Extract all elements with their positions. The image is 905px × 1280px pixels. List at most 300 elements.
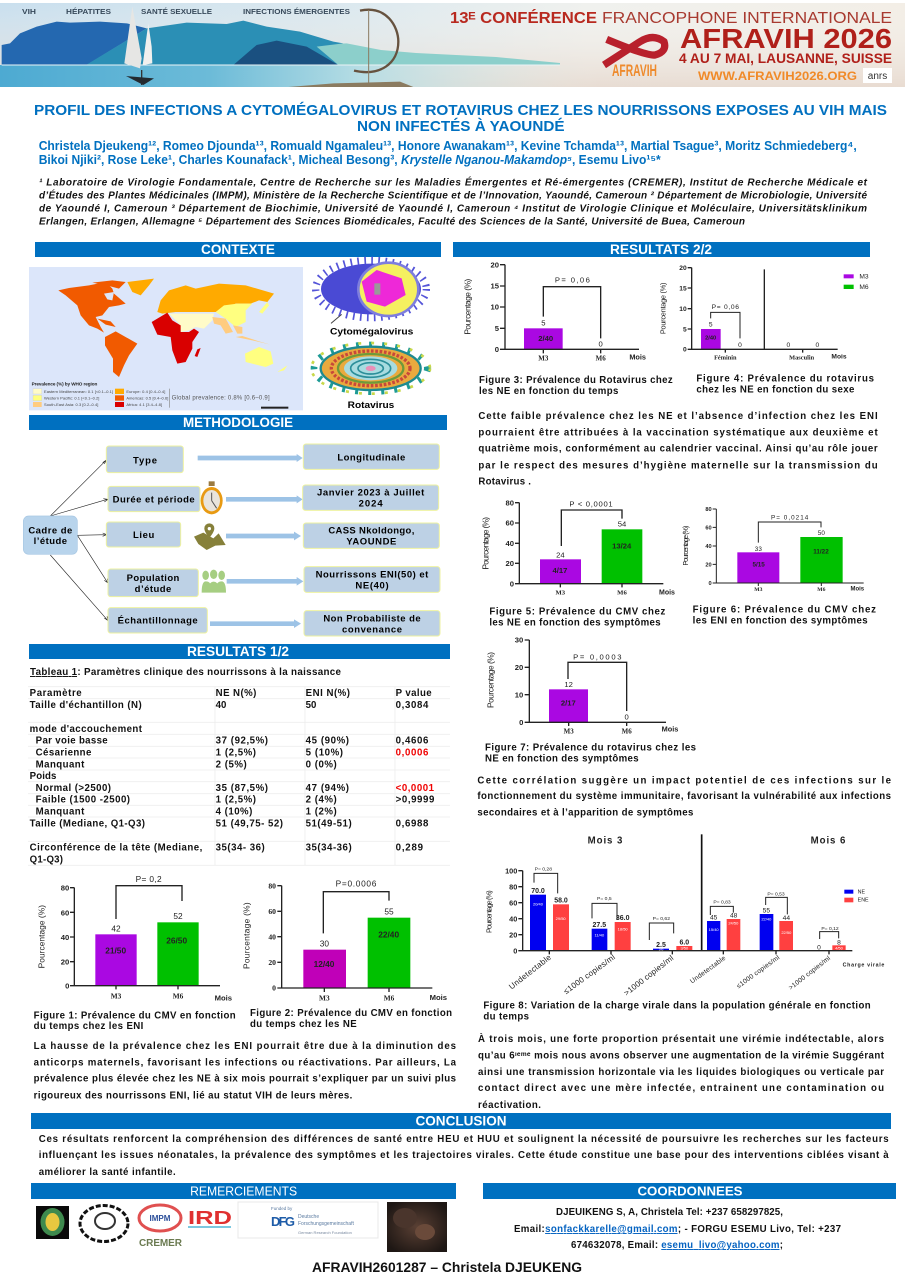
- chart: figure 5: P < 0,0001: [569, 499, 613, 508]
- box: type: Type: [133, 455, 157, 466]
- chart: figure 8 viral load: 6.0: [679, 939, 689, 946]
- box: population: d’étude: [135, 584, 171, 595]
- caption: figure 1: du temps chez les ENI: [34, 1021, 144, 1032]
- text: correlation: [477, 775, 892, 819]
- conference heading: 4 AU 7 MAI, LAUSANNE, SUISSE: [679, 50, 892, 66]
- chart: figure 3: 5: [541, 319, 545, 328]
- conference heading: [450, 10, 892, 83]
- table body rows: [30, 700, 435, 865]
- caption: figure 5: [489, 607, 666, 629]
- chart: figure 6: 60: [705, 525, 712, 531]
- chart: figure 8 viral load: >1000 copies/ml: [788, 955, 832, 992]
- text: rotavirus interpretation: [478, 411, 878, 487]
- chart: figure 6: [683, 507, 865, 593]
- table body rows: 37 (92,5%): [216, 736, 268, 747]
- map legend: Africa: 4.1 [3.4–4.8]: [126, 402, 162, 407]
- chart: figure 2: M6: [384, 994, 395, 1003]
- caption: figure 2: [250, 1008, 452, 1030]
- chart: figure 8 viral load: ≤1000 copies/ml: [562, 953, 617, 996]
- arrow heads: [294, 454, 303, 628]
- chart: figure 7: 0: [625, 713, 629, 722]
- chart: figure 7: 0: [519, 718, 523, 727]
- chart: figure 2: 55: [384, 906, 394, 916]
- table body rows: Manquant: [36, 759, 85, 770]
- text: correlation: fonctionnement du système immunitaire, favorisant la vulnérabilité aux infections: [477, 791, 891, 802]
- table body rows: <0,0001: [396, 783, 435, 794]
- chart: figure 7: P= 0,0003: [573, 652, 621, 661]
- section header: methodologie: METHODOLOGIE: [183, 415, 293, 430]
- text: rotavirus interpretation: quatrième mois, conformément au calendrier vaccinal. Ainsi qu’au rôle jouer: [478, 444, 878, 455]
- table body rows: 0,0006: [396, 748, 429, 759]
- logos: [36, 1202, 447, 1252]
- conference heading: AFRAVIH 2026: [680, 23, 892, 54]
- chart: figure 1: 52: [173, 911, 183, 921]
- afravih ribbon logo: [604, 37, 665, 80]
- chart: figure 4: 2/40: [705, 336, 716, 342]
- chart: figure 2: 22/40: [378, 930, 399, 940]
- text: viral load interpretation: ainsi une transmission horizontale via les liquides biologiques ou verticale par: [478, 1067, 884, 1078]
- title: PROFIL DES INFECTIONS A CYTOMÉGALOVIRUS ET ROTAVIRUS CHEZ LES NOURRISSONS EXPOSES AU VIH MAIS: [34, 102, 887, 119]
- box: cass: CASS Nkoldongo,: [328, 526, 414, 537]
- box: janvier: [303, 485, 439, 510]
- title: [34, 102, 887, 135]
- chart: figure 1: 20: [61, 958, 69, 967]
- table body rows: 0,3084: [396, 700, 429, 711]
- world map: [29, 267, 303, 410]
- footer reference: AFRAVIH2601287 – Christela DJEUKENG: [312, 1260, 582, 1275]
- chart: figure 8 viral load: 36.0: [616, 915, 630, 922]
- chart: figure 3: M3: [538, 354, 549, 362]
- logo: dfg: German Research Foundation: [298, 1230, 352, 1235]
- chart: figure 1: 21/50: [105, 945, 126, 955]
- conference heading: FRANCOPHONE INTERNATIONALE: [602, 10, 892, 27]
- text: viral load interpretation: À trois mois, une forte proportion présentait une virémie indétectable, alors: [478, 1034, 884, 1045]
- chart: figure 8 viral load: 0: [817, 945, 821, 952]
- chart: figure 5: Pourcentage (%): [481, 517, 491, 570]
- icon: stopwatch: [201, 481, 223, 514]
- table body rows: 5 (10%): [306, 748, 343, 759]
- label: rotavirus: Rotavirus: [348, 400, 394, 410]
- map legend: Americas: 0.5 [0.4–0.6]: [126, 396, 168, 401]
- box: non probabiliste: convenance: [342, 624, 402, 635]
- banner themes: VIH: [22, 9, 36, 16]
- box: janvier: Janvier 2023 à Juillet: [317, 488, 425, 499]
- box: longitudinale: [303, 444, 439, 469]
- caption: figure 4: Figure 4: Prévalence du rotavirus: [696, 373, 874, 384]
- section header: remerciements: REMERCIEMENTS: [190, 1184, 297, 1198]
- caption: figure 3: Figure 3: Prévalence du Rotavirus chez: [479, 375, 673, 386]
- chart: figure 2: Mois: [430, 993, 447, 1002]
- section header: contexte: [35, 242, 441, 257]
- arrow: type: [198, 451, 299, 465]
- chart: figure 7: [486, 636, 678, 736]
- section header: conclusion: CONCLUSION: [416, 1114, 506, 1128]
- table grid: [28, 687, 450, 865]
- figure 4 legend: M6: [859, 284, 869, 291]
- chart: figure 1: [36, 874, 232, 1003]
- conference heading: WWW.AFRAVIH2026.ORG: [698, 69, 857, 83]
- chart: figure 8 viral load: P= 0,12: [821, 926, 839, 932]
- chart: figure 7: 20: [515, 663, 523, 672]
- chart: figure 4: Mois: [831, 354, 847, 361]
- chart: figure 1: M6: [173, 991, 184, 1000]
- text: correlation: secondaires et à l’apparition de symptômes: [477, 808, 693, 819]
- chart: figure 6: 20: [705, 562, 712, 568]
- chart: figure 8 viral load: P= 0,5: [597, 896, 612, 902]
- chart: figure 4: 20: [679, 265, 687, 272]
- caption: figure 7: NE en fonction des symptômes: [485, 753, 639, 764]
- chart: figure 8 viral load: >1000 copies/ml: [622, 953, 675, 998]
- chart: figure 6: 33: [755, 546, 762, 553]
- chart: figure 8 viral load: 40: [509, 914, 517, 923]
- table body rows: 47 (94%): [306, 783, 349, 794]
- figure 7 with caption and text: [477, 636, 892, 819]
- table title: Tableau 1: Paramètres clinique des nourrissons à la naissance: [30, 667, 342, 678]
- chart: figure 4: 5: [709, 321, 713, 328]
- table body rows: 35 (87,5%): [216, 783, 268, 794]
- caption: figure 1: [34, 1010, 236, 1032]
- table header row: NE N(%): [216, 688, 256, 699]
- figures 1 and 2 with captions: [34, 874, 457, 1101]
- box: nourrissons: [304, 567, 440, 592]
- logo: impm: [139, 1205, 181, 1231]
- chart: figure 8 viral load: 80: [509, 882, 517, 891]
- box: type: [106, 446, 183, 473]
- section header: coordonnees: [483, 1183, 896, 1199]
- chart: figure 1: Mois: [215, 994, 232, 1003]
- chart: figure 8 viral load: 55: [763, 908, 770, 915]
- box: echantillonnage: Échantillonnage: [118, 616, 198, 627]
- chart: figure 8 viral load: Mois 3: [588, 836, 623, 847]
- chart: figure 1: M3: [111, 991, 122, 1000]
- chart: figure 2: 12/40: [314, 959, 335, 969]
- text: prevalence interpretation: prévalence plus élevée chez les NE à six mois pourrait s’expliquer par un suivi plus: [34, 1074, 456, 1085]
- caption: figure 2: Figure 2: Prévalence du CMV en fonction: [250, 1008, 452, 1019]
- section header: resultats 1/2: RESULTATS 1/2: [187, 644, 289, 659]
- figure 8 with caption: [483, 834, 884, 1023]
- contact details: DJEUIKENG S, A, Christela Tel: +237 658297825,: [556, 1207, 783, 1218]
- section header: conclusion: [31, 1113, 891, 1129]
- logo: dfg: Deutsche: [298, 1214, 319, 1220]
- box: non probabiliste: Non Probabiliste de: [323, 613, 421, 624]
- chart: figure 8 viral load: P= 0,83: [713, 900, 731, 906]
- table header row: ENI N(%): [306, 688, 350, 699]
- chart: figure 1: 42: [111, 923, 121, 933]
- box: janvier: 2024: [359, 499, 383, 510]
- chart: figure 3: 20: [490, 260, 499, 269]
- chart: figure 6: Mois: [851, 587, 865, 593]
- chart: figure 7: M6: [622, 728, 632, 736]
- logo: dfg: Forschungsgemeinschaft: [298, 1221, 354, 1227]
- chart: figure 5: 4/17: [553, 566, 567, 575]
- chart: figure 7: 10: [515, 690, 523, 699]
- chart: figure 8 viral load: 44: [783, 915, 790, 922]
- banner themes: [22, 7, 350, 16]
- table body rows: 0,4606: [396, 736, 429, 747]
- caption: figure 4: chez les NE en fonction du sexe: [696, 384, 855, 395]
- chart: figure 1: 60: [61, 908, 69, 917]
- contact details: Email:sonfackkarelle@gmail.com; - FORGU ESEMU Livo, Tel: +237: [514, 1224, 841, 1235]
- table body rows: Taille (Mediane, Q1-Q3): [30, 818, 145, 829]
- chart: figure 7: Mois: [662, 724, 678, 733]
- authors: [39, 139, 857, 167]
- chart: figure 8 viral load: 27.5: [593, 922, 606, 929]
- chart: figure 5: 13/24: [612, 541, 632, 550]
- chart: figure 1: P= 0,2: [136, 874, 162, 884]
- table body rows: 0,289: [396, 842, 424, 853]
- table body rows: Faible (1500 -2500): [36, 795, 130, 806]
- chart: figure 6: M6: [817, 587, 826, 593]
- section header: remerciements: [31, 1183, 456, 1199]
- box: cadre de l'etude: [23, 516, 77, 554]
- chart: figure 8 viral load: Undetectable: [689, 955, 727, 985]
- banner: [0, 3, 905, 87]
- chart: figure 4: Pourcentage (%): [658, 282, 667, 334]
- banner themes: HÉPATITES: [66, 7, 111, 16]
- figure 8 legend: [844, 890, 869, 904]
- chart: figure 3: P= 0,06: [555, 276, 590, 285]
- panel: virus illustrations: [311, 260, 430, 410]
- arrow: duree: [226, 492, 299, 506]
- map legend: Global prevalence: 0.8% [0.6–0.9]: [172, 396, 270, 402]
- table body rows: Circonférence de la tête (Mediane,: [30, 842, 203, 853]
- logo: cremer: CREMER: [139, 1238, 183, 1249]
- chart: figure 6: 0: [709, 581, 712, 587]
- chart: figure 5: 24: [556, 550, 565, 559]
- contact details: 674632078, Email: esemu_livo@yahoo.com;: [571, 1240, 783, 1251]
- text: prevalence interpretation: La hausse de la prévalence chez les ENI pourrait être due à la diminution des: [34, 1041, 456, 1052]
- authors: Christela Djeukeng¹², Romeo Djounda¹³, Romuald Ngamaleu¹³, Honore Awanakam¹³, Kevine Tchamda¹³, Martial Tsague³, Moritz Schmiedeberg⁴,: [39, 139, 857, 153]
- caption: figure 6: les ENI en fonction des symptômes: [693, 616, 868, 627]
- table body rows: 4 (10%): [216, 807, 252, 818]
- table header row: P value: [396, 688, 432, 699]
- table header row: [30, 688, 432, 699]
- chart: figure 8 viral load: 70.0: [531, 888, 545, 895]
- arrow: lieu: [226, 529, 297, 543]
- text: rotavirus interpretation: pourraient être attribuées à la vaccination systématique aux deuxième et: [478, 427, 878, 438]
- map legend: South-East Asia: 0.3 [0.2–0.4]: [44, 402, 98, 407]
- text: correlation: Cette corrélation suggère un impact potentiel de ces infections sur le: [477, 775, 892, 786]
- table body rows: 35(34-36): [306, 842, 352, 853]
- chart: figure 8 viral load: Charge virale: [843, 962, 884, 968]
- chart: figure 1: 80: [61, 884, 69, 893]
- map legend: Eastern Mediterranean: 0.1 [<0.1–0.1]: [44, 389, 113, 394]
- text: viral load interpretation: [478, 1034, 885, 1111]
- section header: methodologie: [29, 415, 447, 430]
- chart: figure 8 viral load: 24/50: [728, 921, 739, 926]
- table body rows: 2 (5%): [216, 759, 247, 770]
- box: lieu: [106, 522, 181, 547]
- chart: figure 8 viral load: 15/40: [709, 927, 719, 932]
- chart: figure 4: 5: [683, 326, 687, 333]
- chart: figure 7: 2/17: [561, 698, 576, 707]
- affiliations: d’Études des Plantes Médicinales (IMPM), Ministère de la Recherche Scientifique et de l’Innovation, Yaoundé, Cameroun ² Département de Microbiologie, Université: [39, 188, 867, 202]
- chart: figure 8 viral load: [485, 834, 884, 998]
- table header row: Paramètre: [30, 688, 82, 699]
- chart: figure 8 viral load: 4/50: [835, 945, 844, 950]
- chart: figure 8 viral load: Pourcentage (%): [485, 890, 494, 933]
- table body rows: 35(34- 36): [216, 842, 265, 853]
- chart: figure 7: 30: [515, 636, 523, 645]
- banner landscape: [2, 7, 560, 87]
- affiliations: Erlangen, Erlangen, Allemagne ⁵ Département des Sciences Biomédicales, Faculté des Sciences de la Santé, Université de Buea, Cameroun: [39, 216, 745, 228]
- box: population: Population: [127, 573, 180, 584]
- logo: ird: IRD: [188, 1208, 232, 1228]
- contact details: [514, 1207, 841, 1251]
- arrow: population: [227, 574, 299, 588]
- map legend: Western Pacific: 0.1 [<0.1–0.2]: [44, 396, 99, 401]
- chart: figure 8 viral load: 22/50: [781, 930, 792, 935]
- table body rows: 50: [306, 700, 316, 711]
- chart: figure 8 viral load: 0: [513, 946, 517, 955]
- table body rows: 51(49-51): [306, 818, 352, 829]
- section header: resultats 1/2: [29, 644, 450, 659]
- chart: figure 8 viral load: 3/50: [680, 946, 689, 951]
- text: viral load interpretation: qu’au 6ᶦᵉᵐᵉ mois nous avons observer une augmentation de la virémie Suggérant: [478, 1050, 885, 1062]
- text: prevalence interpretation: rigoureux des nourrissons ENI, lié au statut VIH de leurs mères.: [34, 1090, 353, 1101]
- box: cadre de l'etude: l’étude: [34, 536, 67, 547]
- chart: figure 2: 0: [272, 984, 276, 993]
- authors: Bikoi Njiki², Rose Leke¹, Charles Kounafack¹, Micheal Besong³, Krystelle Nganou-Makamdop⁵, Esemu Livo¹⁵*: [39, 153, 661, 167]
- table body rows: Manquant: [36, 807, 85, 818]
- arrow: echantillonnage: [210, 617, 297, 631]
- caption: figure 8: du temps: [483, 1012, 529, 1023]
- chart: figure 8 viral load: 1/40: [659, 950, 664, 952]
- logo: dfg: Funded by: [271, 1206, 293, 1211]
- text: rotavirus interpretation: par le respect des mesures d’hygiène maternelle sur la transmission du: [478, 460, 878, 471]
- chart: figure 5: 80: [505, 498, 514, 507]
- chart: figure 3: Mois: [629, 353, 646, 362]
- chart: figure 3: 2/40: [538, 334, 553, 343]
- chart: figure 2: 30: [320, 938, 329, 948]
- chart: figure 5: 0: [510, 579, 514, 588]
- chart: figure 8 viral load: 20: [509, 930, 517, 939]
- chart: figure 8 viral load: 29/50: [556, 916, 566, 921]
- icon: map: [194, 523, 226, 550]
- chart: figure 5: 40: [505, 539, 514, 548]
- logo: impm: IMPM: [150, 1214, 171, 1223]
- caption: figure 6: [693, 605, 876, 627]
- chart: figure 1: 40: [61, 933, 69, 942]
- box: duree: Durée et période: [113, 494, 195, 505]
- chart: figure 4: 0: [738, 342, 742, 349]
- table body rows: Normal (>2500): [36, 783, 111, 794]
- table body rows: Q1-Q3): [30, 854, 63, 865]
- chart: figure 7: Pourcentage (%): [486, 652, 496, 708]
- chart: figure 5: [481, 498, 675, 597]
- text: conclusion: influençant les issues néonatales, la prévalence des symptômes et les trajectoires virales. Cette étude constitue une base pour des interventions ciblées visant à: [39, 1150, 889, 1161]
- box: cass: [303, 523, 439, 548]
- chart: figure 6: M3: [754, 587, 763, 593]
- table body rows: 51 (49,75- 52): [216, 818, 283, 829]
- text: conclusion: améliorer la santé infantile.: [39, 1167, 176, 1178]
- banner themes: INFECTIONS ÉMERGENTES: [243, 7, 350, 16]
- text: viral load interpretation: réactivation.: [478, 1100, 541, 1111]
- text: rotavirus interpretation: Rotavirus .: [478, 476, 531, 487]
- box: lieu: Lieu: [133, 530, 155, 541]
- panel: methodologie flow diagram: [23, 444, 440, 636]
- chart: figure 8 viral load: P= 0,62: [653, 916, 670, 922]
- text: conclusion: Ces résultats renforcent la compréhension des différences de santé entre HEU et HUU et soulignent la nécessité de poursuivre les recherches sur les facteurs: [39, 1134, 889, 1145]
- box: duree: [108, 486, 200, 512]
- table body rows: mode d'accouchement: [30, 724, 143, 735]
- chart: figure 3: 0: [495, 345, 499, 354]
- box: nourrissons: NE(40): [355, 581, 389, 592]
- box: nourrissons: Nourrissons ENI(50) et: [316, 570, 429, 581]
- chart: figure 3: [462, 260, 646, 362]
- chart: figure 8 viral load: 8: [837, 939, 841, 946]
- chart: figure 6: Pourcentage (%): [683, 526, 690, 566]
- chart: figure 6: 11/22: [813, 549, 829, 556]
- icon: people: [202, 570, 226, 593]
- chart: figure 2: 60: [268, 907, 276, 916]
- chart: figure 5: 20: [505, 559, 514, 568]
- figure 4 legend: [844, 274, 869, 291]
- connecting arrows: [50, 460, 108, 621]
- section header: coordonnees: COORDONNEES: [638, 1184, 743, 1198]
- figure 8 legend: NE: [858, 890, 866, 896]
- box: echantillonnage: [108, 608, 207, 633]
- box: longitudinale: Longitudinale: [337, 452, 405, 463]
- affiliations: de Yaoundé I, Cameroun ³ Département de Biochimie, Université de Yaoundé I, Cameroun ⁴ Institut de Virologie Clinique et Moléculaire, Universitätsklinikum: [39, 204, 867, 214]
- chart: figure 6: 50: [818, 530, 825, 537]
- virus: cytomegalovirus: [316, 260, 426, 323]
- chart: figure 2: 80: [268, 882, 276, 891]
- section header: contexte: CONTEXTE: [201, 242, 275, 257]
- anrs logo: anrs: [868, 71, 887, 82]
- table body rows: >0,9999: [396, 795, 435, 806]
- chart: figure 4: [658, 265, 869, 362]
- chart: figure 5: M6: [617, 590, 627, 597]
- afravih ribbon logo: AFRAVIH: [612, 61, 657, 80]
- chart: figure 7: M3: [564, 728, 574, 736]
- box: population: [108, 569, 198, 597]
- caption: figure 3: les NE en fonction du temps: [479, 386, 618, 397]
- text: prevalence interpretation: anticorps maternels, favorisant les infections ou réactivations. Par ailleurs, La: [34, 1057, 457, 1068]
- table body rows: 45 (90%): [306, 736, 349, 747]
- chart: figure 8 viral load: 60: [509, 898, 517, 907]
- logo: cameroon: [36, 1206, 69, 1239]
- chart: figure 8 viral load: 48: [730, 912, 738, 919]
- anrs logo: [863, 68, 892, 83]
- chart: figure 8 viral load: 22/40: [761, 917, 772, 922]
- chart: figure 6: 40: [705, 544, 712, 550]
- table body rows: 1 (2,5%): [216, 795, 256, 806]
- chart: figure 8 viral load: ≤1000 copies/ml: [736, 954, 782, 990]
- table body rows: Taille d'échantillon (N): [30, 700, 142, 711]
- caption: figure 1: Figure 1: Prévalence du CMV en fonction: [34, 1010, 236, 1021]
- table body rows: Poids: [30, 771, 56, 782]
- label: cytomegalovirus: Cytomégalovirus: [330, 327, 413, 337]
- chart: figure 4: Masculin: [789, 355, 815, 362]
- chart: figure 8 viral load: 100: [505, 866, 517, 875]
- table body rows: 0 (0%): [306, 759, 337, 770]
- chart: figure 1: 0: [65, 982, 69, 991]
- box: cadre de l'etude: Cadre de: [28, 525, 72, 536]
- banner themes: SANTÉ SEXUELLE: [141, 7, 212, 16]
- table 1: [28, 687, 450, 865]
- chart: figure 3: 10: [490, 303, 499, 312]
- chart: figure 8 viral load: 2.5: [656, 942, 666, 949]
- chart: figure 1: Pourcentage (%): [36, 905, 46, 968]
- chart: figure 5: 54: [618, 519, 627, 528]
- chart: figure 8 viral load: 18/50: [618, 927, 628, 932]
- chart: figure 6: P= 0,0214: [771, 514, 809, 521]
- chart: figure 8 viral load: 20/40: [533, 901, 544, 906]
- caption: figure 5: Figure 5: Prévalence du CMV chez: [489, 607, 666, 618]
- chart: figure 8 viral load: Mois 6: [811, 836, 846, 847]
- chart: figure 8 viral load: 11/40: [594, 933, 605, 938]
